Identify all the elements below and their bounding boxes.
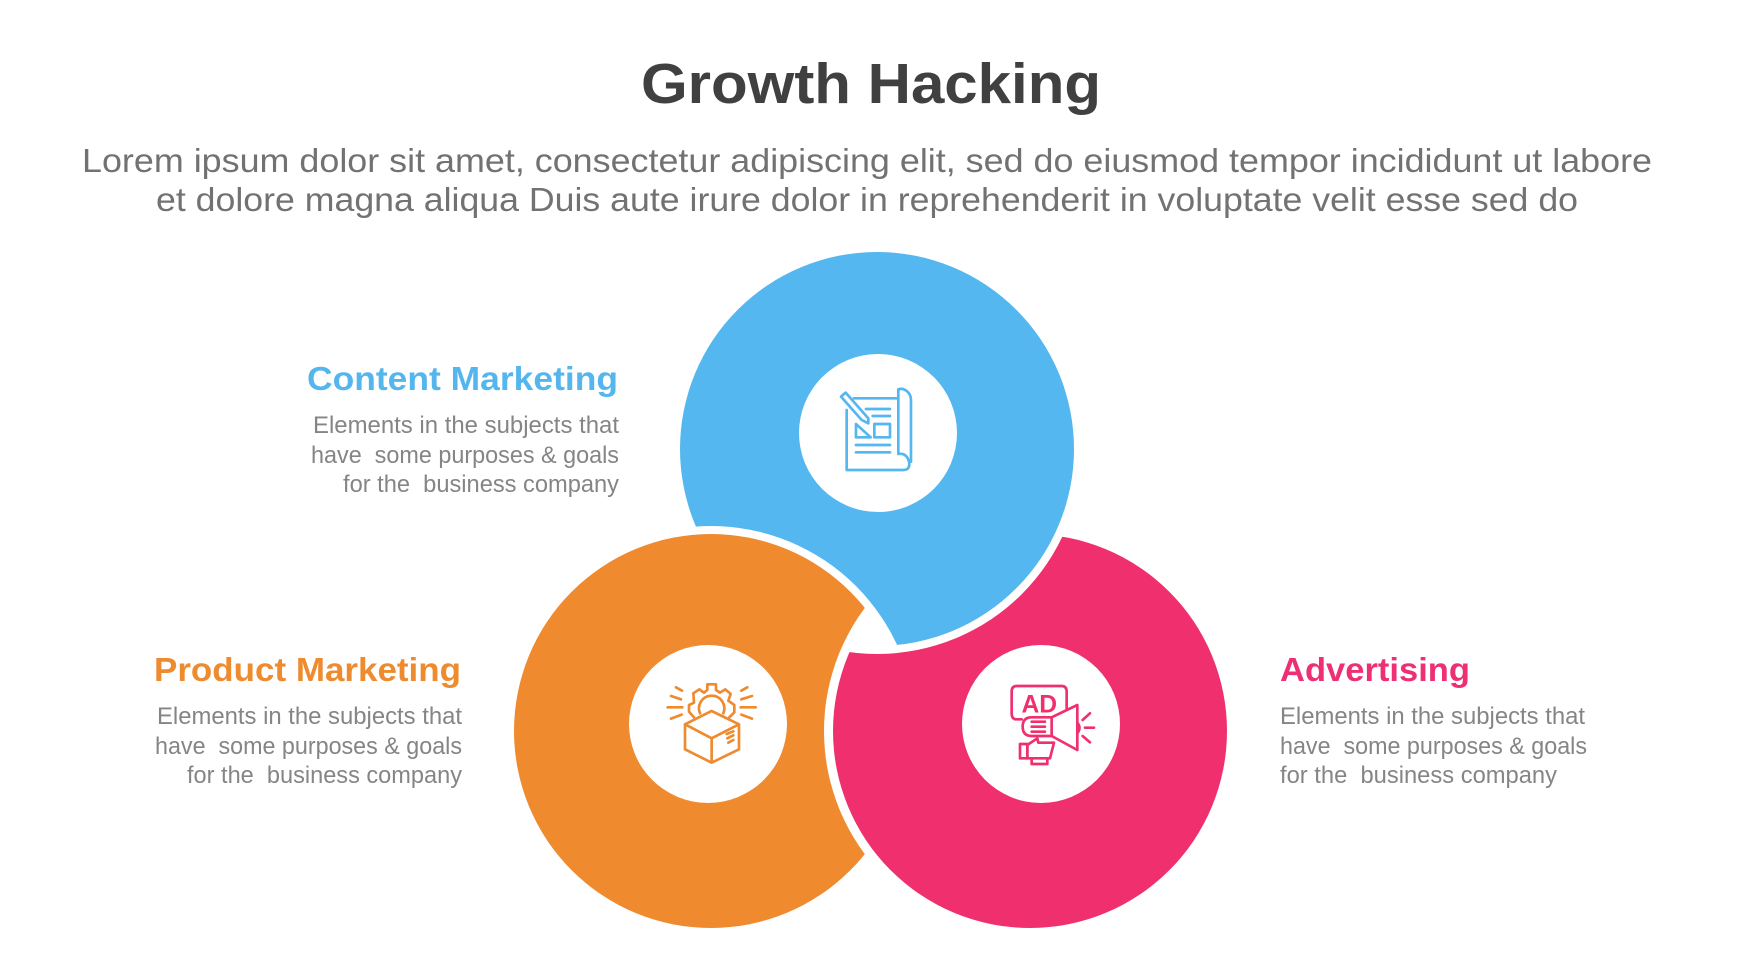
text block: Content Marketing: Content Marketing [307, 360, 618, 397]
text block: Content Marketing: have some purposes & goals [311, 442, 619, 469]
icon badge: advertising [962, 645, 1120, 803]
text block: Advertising: have some purposes & goals [1280, 733, 1587, 760]
subtitle text block: et dolore magna aliqua Duis aute irure dolor in reprehenderit in voluptate velit esse sed do [156, 181, 1578, 218]
icon: megaphone with AD bubble [1012, 686, 1094, 764]
title: Growth Hacking [641, 52, 1101, 116]
subtitle text block [82, 142, 1652, 218]
text block: Advertising: Advertising [1280, 651, 1470, 688]
panel: blue circle segment [680, 252, 1074, 646]
text block: Advertising: Elements in the subjects that [1280, 703, 1585, 730]
text block: Advertising: for the business company [1280, 762, 1557, 789]
icon: megaphone with AD bubble: AD [1022, 692, 1057, 719]
text block: Content Marketing: Elements in the subjects that [313, 412, 619, 439]
text block: Product Marketing: Elements in the subjects that [157, 703, 462, 730]
panel: pink circle segment [833, 534, 1227, 928]
text block: Product Marketing [154, 651, 462, 789]
subtitle text block: Lorem ipsum dolor sit amet, consectetur adipiscing elit, sed do eiusmod tempor incididunt ut labore [82, 142, 1652, 179]
text block: Product Marketing: have some purposes & goals [155, 733, 462, 760]
icon badge: product marketing [629, 645, 787, 803]
text block: Advertising [1280, 651, 1587, 789]
text block: Product Marketing: for the business company [187, 762, 462, 789]
icon: document with pencil [841, 389, 911, 470]
icon: box with gear [668, 684, 756, 763]
panel: orange circle segment [514, 534, 865, 928]
text block: Product Marketing: Product Marketing [154, 651, 461, 688]
icon badge: content marketing [799, 354, 957, 512]
text block: Content Marketing [307, 360, 619, 498]
text block: Content Marketing: for the business company [343, 471, 619, 498]
